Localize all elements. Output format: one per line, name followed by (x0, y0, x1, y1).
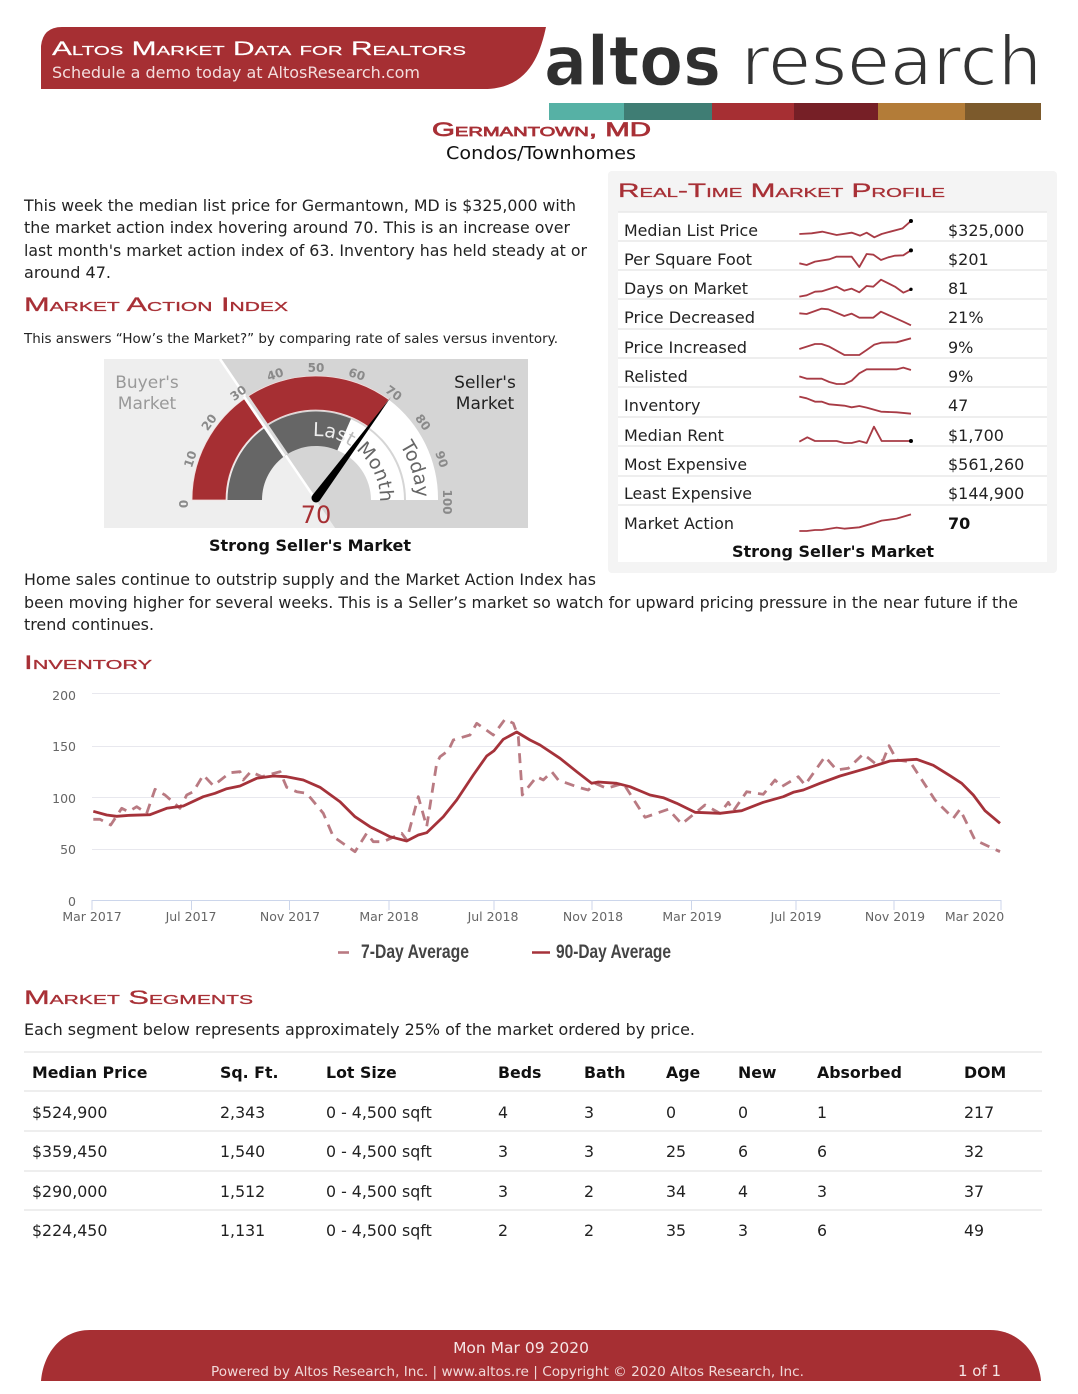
table row 4 (32, 1221, 984, 1240)
chart legend (338, 942, 671, 963)
row: market action: Market Action (624, 514, 734, 533)
gauge band: today remainder (369, 400, 438, 500)
row: per square foot (624, 248, 989, 269)
x axis labels: Nov 2018 (563, 909, 623, 924)
row: least expensive: Least Expensive (624, 484, 752, 503)
table row 2 (32, 1142, 984, 1161)
gauge label: seller's market: Market (456, 394, 515, 414)
footer date: Mon Mar 09 2020 (453, 1339, 589, 1357)
x axis labels: Mar 2017 (62, 909, 122, 924)
table row 1 (32, 1103, 994, 1122)
table header: New (738, 1063, 777, 1082)
y axis labels: 200 (52, 688, 76, 703)
x axis labels: Mar 2019 (662, 909, 722, 924)
gauge caption: Strong Seller's Market (209, 536, 411, 555)
y axis labels: 150 (52, 739, 76, 754)
table header (32, 1063, 1006, 1082)
row: relisted (624, 367, 973, 386)
gauge tick labels: 100 (440, 489, 454, 515)
table row 4: $224,450 (32, 1221, 107, 1240)
intro paragraph (23, 196, 587, 282)
line chart: inventory (52, 688, 1004, 924)
row: inventory (624, 396, 968, 415)
gauge tick labels: 10 (181, 449, 200, 469)
gauge tick labels: 50 (308, 361, 324, 375)
logo colour bar (549, 103, 1041, 120)
gauge band: last month (228, 412, 351, 500)
table row 1: 0 (738, 1103, 748, 1122)
x axis labels: Nov 2019 (865, 909, 925, 924)
intro paragraph: the market action index hovering around 70. This is an increase over (24, 218, 570, 237)
gauge label: buyer's market: Buyer's (115, 373, 179, 393)
x axis labels: Mar 2018 (359, 909, 419, 924)
heading: inventory: Inventory (24, 653, 153, 674)
table row 1: 0 - 4,500 sqft (326, 1103, 432, 1122)
table header: Age (666, 1063, 700, 1082)
row: price decreased: Price Decreased (624, 308, 755, 327)
row: median list price (624, 219, 1024, 240)
table row 1: 4 (498, 1103, 508, 1122)
row: price increased: Price Increased (624, 338, 747, 357)
row: relisted: 9% (948, 367, 973, 386)
table row 3: 3 (498, 1182, 508, 1201)
gauge tick labels: 0 (177, 500, 191, 508)
table row 3: 2 (584, 1182, 594, 1201)
gauge text: today: Today (402, 438, 426, 496)
gauge tick labels: 60 (347, 365, 367, 384)
market commentary paragraph: Home sales continue to outstrip supply and the Market Action Index has (24, 570, 596, 589)
logo: altos (544, 22, 721, 102)
market commentary paragraph: trend continues. (24, 615, 154, 634)
gauge tick labels: 90 (432, 449, 451, 469)
table header: DOM (964, 1063, 1006, 1082)
table header: Median Price (32, 1063, 147, 1082)
heading: market action index: Market Action Index (24, 295, 289, 316)
subtitle: Condos/Townhomes (446, 143, 636, 164)
x axis labels: Mar 2020 (945, 909, 1004, 924)
row: least expensive: $144,900 (948, 484, 1024, 503)
gauge band: today (192, 376, 389, 500)
footer copyright: Powered by Altos Research, Inc. | www.altos.re | Copyright © 2020 Altos Research, Inc. (211, 1364, 804, 1380)
row: price increased (624, 338, 973, 357)
y axis labels: 50 (60, 842, 76, 857)
panel heading: Real-Time Market Profile (618, 181, 945, 202)
table row 2: 6 (817, 1142, 827, 1161)
gauge value: 70 (301, 501, 331, 529)
row: price increased: 9% (948, 338, 973, 357)
row: inventory: Inventory (624, 396, 700, 415)
title (432, 120, 651, 164)
y axis labels (52, 688, 76, 909)
x axis labels: Jul 2018 (467, 909, 518, 924)
table row 4: 3 (738, 1221, 748, 1240)
gauge tick labels (177, 361, 454, 515)
row: relisted: Relisted (624, 367, 688, 386)
row: price decreased: 21% (948, 308, 984, 327)
row: price decreased (624, 308, 984, 327)
gauge tick labels: 30 (228, 383, 249, 404)
table row 3: 1,512 (220, 1182, 265, 1201)
footer page number: 1 of 1 (958, 1362, 1001, 1380)
table row 3 (32, 1182, 984, 1201)
table row 3: 3 (817, 1182, 827, 1201)
segments description: Each segment below represents approximately 25% of the market ordered by price. (24, 1020, 695, 1039)
table row 1: 3 (584, 1103, 594, 1122)
banner title: Altos Market Data for Realtors (52, 39, 467, 60)
logo: research (741, 22, 1042, 102)
panel caption: Strong Seller's Market (732, 542, 934, 561)
row: median rent (624, 426, 1004, 445)
table header: Beds (498, 1063, 541, 1082)
row: median list price: Median List Price (624, 221, 758, 240)
table header: Sq. Ft. (220, 1063, 279, 1082)
row: days on market: 81 (948, 279, 968, 298)
market commentary paragraph (24, 570, 1018, 634)
header banner (41, 27, 546, 89)
gauge text: last month: Last Month (314, 422, 394, 500)
gauge label: buyer's market: Market (118, 394, 177, 414)
gauge tick labels: 70 (383, 383, 404, 404)
row: per square foot: Per Square Foot (624, 250, 752, 269)
table row 2: 25 (666, 1142, 686, 1161)
table row 2: 1,540 (220, 1142, 265, 1161)
table row 2: 32 (964, 1142, 984, 1161)
gauge tick labels: 80 (412, 412, 433, 433)
table header: Absorbed (817, 1063, 902, 1082)
row: most expensive: Most Expensive (624, 455, 747, 474)
row: days on market: Days on Market (624, 279, 748, 298)
table row 4: 6 (817, 1221, 827, 1240)
chart legend: 7-Day Average (361, 942, 469, 963)
gauge label: seller's market: Seller's (454, 373, 516, 393)
y axis labels: 100 (52, 791, 76, 806)
intro paragraph: This week the median list price for Germantown, MD is $325,000 with (23, 196, 576, 215)
logo (544, 22, 1042, 102)
table row 3: 37 (964, 1182, 984, 1201)
x axis (92, 900, 1001, 910)
table row 3: $290,000 (32, 1182, 107, 1201)
row: market action: 70 (948, 514, 970, 533)
row: most expensive (624, 455, 1024, 474)
table row 2: 6 (738, 1142, 748, 1161)
table row 1: 217 (964, 1103, 994, 1122)
table row 2: 3 (498, 1142, 508, 1161)
intro paragraph: last month's market action index of 63. Inventory has held steady at or (24, 241, 587, 260)
row: median list price: $325,000 (948, 221, 1024, 240)
table row 4: 2 (498, 1221, 508, 1240)
banner subtitle: Schedule a demo today at AltosResearch.com (52, 63, 420, 82)
heading: market segments: Market Segments (24, 988, 254, 1009)
table row 4: 1,131 (220, 1221, 265, 1240)
table row 1: 2,343 (220, 1103, 265, 1122)
intro paragraph: around 47. (24, 263, 111, 282)
gauge: market action index (104, 359, 528, 529)
x axis labels: Jul 2017 (165, 909, 216, 924)
series: 90-day average (93, 732, 1000, 841)
table row 3: 4 (738, 1182, 748, 1201)
panel: real-time market profile (608, 171, 1057, 573)
chart legend: 90-Day Average (556, 942, 671, 963)
table row 2: 3 (584, 1142, 594, 1161)
table row 2: 0 - 4,500 sqft (326, 1142, 432, 1161)
table row 3: 0 - 4,500 sqft (326, 1182, 432, 1201)
table: market segments (24, 1052, 1042, 1240)
table row 2: $359,450 (32, 1142, 107, 1161)
gauge tick labels: 40 (265, 365, 285, 384)
row: days on market (624, 279, 968, 298)
table row 4: 35 (666, 1221, 686, 1240)
x axis labels: Nov 2017 (260, 909, 320, 924)
table row 1: $524,900 (32, 1103, 107, 1122)
table row 4: 2 (584, 1221, 594, 1240)
table row 1: 0 (666, 1103, 676, 1122)
table row 4: 49 (964, 1221, 984, 1240)
row: least expensive (624, 484, 1024, 503)
series: 7-day average (93, 719, 1000, 852)
row: market action (624, 514, 970, 533)
x axis labels (62, 909, 1004, 924)
market action description: This answers “How’s the Market?” by comparing rate of sales versus inventory. (23, 331, 558, 347)
table header: Lot Size (326, 1063, 397, 1082)
gauge band: last month remainder (337, 419, 404, 500)
market commentary paragraph: been moving higher for several weeks. This is a Seller’s market so watch for upward pricing pressure in the near future if the (24, 593, 1018, 612)
y axis labels: 0 (68, 894, 76, 909)
row: per square foot: $201 (948, 250, 989, 269)
gauge needle (312, 397, 391, 502)
title: Germantown, MD (432, 120, 651, 141)
footer (41, 1330, 1041, 1381)
gauge tick labels: 20 (199, 412, 220, 433)
row: median rent: Median Rent (624, 426, 724, 445)
table header: Bath (584, 1063, 626, 1082)
x axis labels: Jul 2019 (770, 909, 821, 924)
row: most expensive: $561,260 (948, 455, 1024, 474)
row: inventory: 47 (948, 396, 968, 415)
table row 4: 0 - 4,500 sqft (326, 1221, 432, 1240)
table row 1: 1 (817, 1103, 827, 1122)
row: median rent: $1,700 (948, 426, 1004, 445)
table row 3: 34 (666, 1182, 686, 1201)
